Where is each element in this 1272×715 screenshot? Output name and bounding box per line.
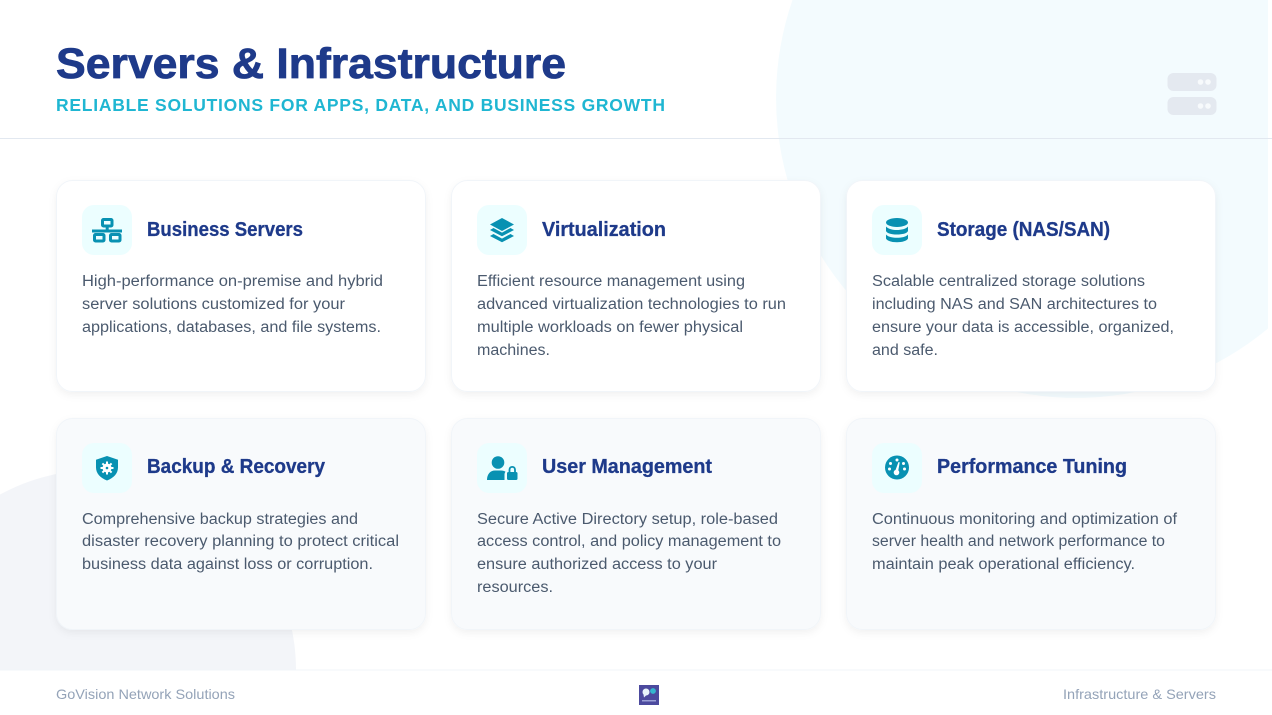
description — [872, 511, 1178, 573]
background circle: top right — [776, 0, 1268, 398]
panel: backup and recovery — [56, 418, 426, 630]
icon: gauge — [872, 443, 922, 493]
heading: Storage (NAS/SAN) — [937, 219, 1110, 241]
title: Servers & Infrastructure — [56, 40, 566, 88]
subtitle: RELIABLE SOLUTIONS FOR APPS, DATA, AND BUSINESS GROWTH — [56, 95, 665, 115]
icon: layers — [477, 205, 527, 255]
panel: user management — [452, 418, 820, 630]
description — [477, 273, 786, 359]
description: machines. — [477, 342, 550, 359]
description: business data against loss or corruption. — [82, 556, 373, 573]
description: multiple workloads on fewer physical — [477, 319, 743, 336]
description: server health and network performance to — [872, 533, 1165, 550]
description: resources. — [477, 579, 553, 596]
description: and safe. — [872, 342, 938, 359]
heading: Business Servers — [147, 219, 303, 241]
description: High-performance on-premise and hybrid — [82, 273, 383, 290]
description: maintain peak operational efficiency. — [872, 556, 1135, 573]
description — [82, 273, 383, 336]
icon: database — [872, 205, 922, 255]
description: Comprehensive backup strategies and — [82, 511, 358, 528]
description: Scalable centralized storage solutions — [872, 273, 1145, 290]
icon: server stack — [1168, 73, 1216, 115]
heading: Performance Tuning — [937, 456, 1127, 478]
description: Continuous monitoring and optimization of — [872, 511, 1178, 528]
description: ensure your data is accessible, organized, — [872, 319, 1174, 336]
heading: Virtualization — [542, 219, 666, 241]
description: advanced virtualization technologies to run — [477, 296, 786, 313]
description: access control, and policy management to — [477, 533, 781, 550]
panel: virtualization — [452, 180, 820, 392]
description: ensure authorized access to your — [477, 556, 717, 573]
heading: User Management — [542, 456, 712, 478]
heading: Backup & Recovery — [147, 456, 326, 478]
description — [872, 273, 1174, 359]
footer — [0, 670, 1272, 715]
icon: logo — [639, 685, 659, 705]
footer: section name: Infrastructure & Servers — [1063, 686, 1216, 702]
description: server solutions customized for your — [82, 296, 345, 313]
description: disaster recovery planning to protect critical — [82, 533, 399, 550]
panel: business servers — [56, 180, 426, 392]
description: including NAS and SAN architectures to — [872, 296, 1157, 313]
icon: user with lock — [477, 443, 527, 493]
panel: storage — [846, 180, 1216, 392]
description — [82, 511, 399, 573]
background circle: bottom left — [0, 470, 296, 670]
footer: company name: GoVision Network Solutions — [56, 686, 235, 702]
icon: network — [82, 205, 132, 255]
description — [477, 511, 781, 596]
panel: performance tuning — [846, 418, 1216, 630]
description: Secure Active Directory setup, role-based — [477, 511, 778, 528]
description: Efficient resource management using — [477, 273, 745, 290]
icon: shield — [82, 443, 132, 493]
description: applications, databases, and file systems. — [82, 319, 381, 336]
